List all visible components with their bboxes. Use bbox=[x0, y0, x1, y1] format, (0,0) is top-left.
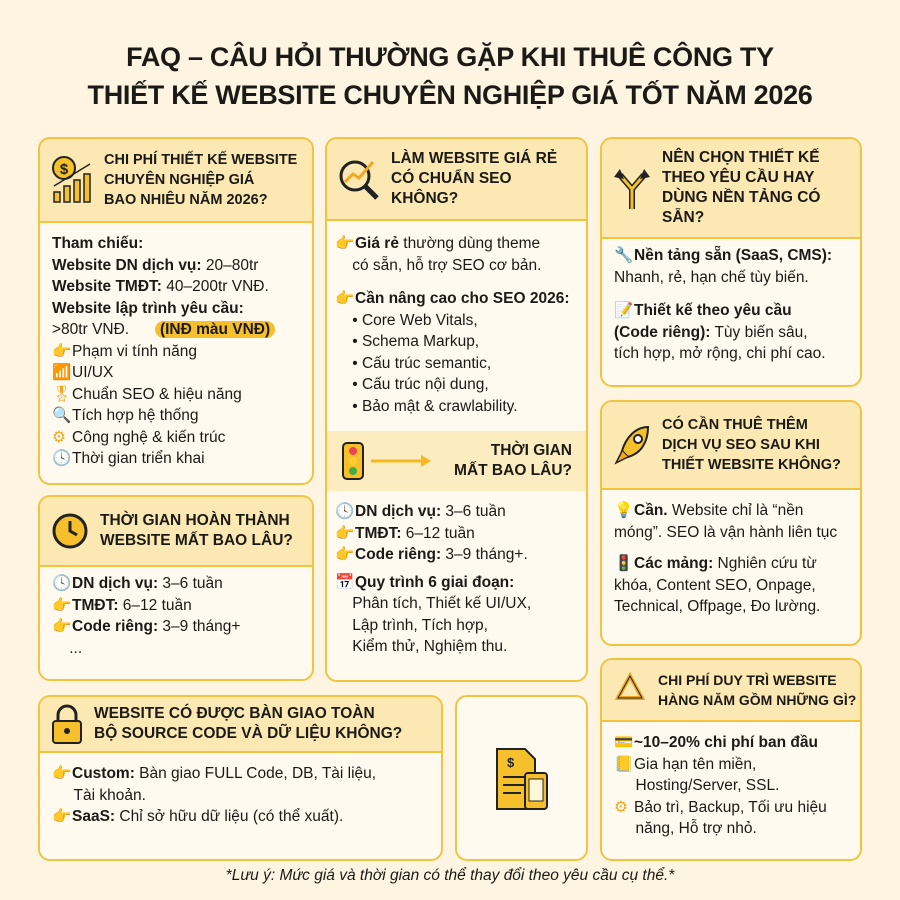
heading: yêu cầu hay nền tảng bbox=[602, 139, 860, 239]
heading: bàn giao bbox=[40, 697, 441, 753]
body: chi phí: Website DN dịch vụ: 20–80tr bbox=[52, 256, 258, 274]
heading: yêu cầu hay nền tảng: NÊN CHỌN THIẾT KẾ bbox=[662, 149, 820, 166]
heading: chi phí: $ bbox=[60, 161, 69, 178]
body: yêu cầu hay nền tảng: Nhanh, rẻ, hạn chế tùy biến. Thiết kế theo yêu cầu bbox=[614, 268, 809, 319]
body: thời gian hoàn thành: DN dịch vụ: 3–6 tuần bbox=[72, 575, 223, 592]
body: thời gian: DN dịch vụ: 3–6 tuần bbox=[355, 503, 506, 520]
body: giá rẻ SEO: 👉 bbox=[335, 235, 354, 252]
body: chi phí: ⚙ bbox=[52, 428, 66, 446]
body: bàn giao: 👉 bbox=[52, 808, 71, 825]
heading: bàn giao: BỘ SOURCE CODE VÀ DỮ LIỆU KHÔNG? bbox=[94, 725, 402, 742]
heading: chi phí bbox=[40, 139, 312, 223]
heading: chi phí: BAO NHIÊU NĂM 2026? bbox=[104, 192, 268, 208]
body: thời gian hoàn thành: 👉 bbox=[52, 596, 71, 614]
footer note: *Lưu ý: Mức giá và thời gian có thể thay đổi theo yêu cầu cụ thể.* bbox=[226, 867, 674, 884]
body: giá rẻ SEO: • Schema Markup, bbox=[352, 333, 479, 350]
panel: yêu cầu hay nền tảng bbox=[600, 137, 862, 387]
body: thời gian: 🕓 bbox=[335, 503, 354, 520]
body: bàn giao bbox=[52, 765, 376, 825]
body: giá rẻ SEO: Giá rẻ thường dùng theme bbox=[355, 235, 540, 252]
body: yêu cầu hay nền tảng bbox=[614, 246, 832, 362]
body: thuê SEO: Technical, Offpage, Đo lường. bbox=[614, 598, 820, 615]
body: chi phí duy trì: ⚙ bbox=[614, 798, 628, 816]
heading: thời gian hoàn thành: WEBSITE MẤT BAO LÂU? bbox=[100, 532, 293, 549]
heading: yêu cầu hay nền tảng: DÙNG NỀN TẢNG CÓ bbox=[662, 189, 820, 206]
panel: chi phí bbox=[38, 137, 314, 485]
heading: giá rẻ SEO bbox=[327, 139, 586, 221]
body: chi phí: Phạm vi tính năng bbox=[72, 342, 197, 360]
panel: chi phí duy trì bbox=[600, 658, 862, 861]
body: chi phí duy trì bbox=[614, 734, 827, 837]
title: FAQ – CÂU HỎI THƯỜNG GẶP KHI THUÊ CÔNG TY bbox=[126, 42, 774, 72]
body: giá rẻ SEO: 👉 bbox=[335, 290, 354, 307]
body: chi phí: Tham chiếu: bbox=[52, 235, 143, 252]
title bbox=[88, 42, 812, 110]
body: thời gian: 👉 bbox=[335, 546, 354, 563]
body: thời gian: Lập trình, Tích hợp, bbox=[352, 616, 488, 634]
body: chi phí: 📶 bbox=[52, 364, 71, 381]
body: thời gian hoàn thành: ... bbox=[69, 640, 82, 656]
heading: chi phí duy trì: HÀNG NĂM GỒM NHỮNG GÌ? bbox=[658, 692, 856, 708]
body: giá rẻ SEO: • Cấu trúc nội dung, bbox=[352, 376, 489, 393]
body: thuê SEO: 💡 bbox=[614, 502, 633, 519]
body: thời gian hoàn thành: 👉 bbox=[52, 618, 71, 635]
heading: thuê SEO: THIẾT WEBSITE KHÔNG? bbox=[662, 457, 841, 473]
panel: thuê SEO bbox=[600, 400, 862, 646]
body: thời gian hoàn thành bbox=[52, 574, 240, 656]
body: chi phí: 🔍 bbox=[52, 407, 71, 424]
body: giá rẻ SEO: có sẵn, hỗ trợ SEO cơ bản. Cần nâng cao cho SEO 2026: bbox=[352, 256, 569, 307]
body: chi phí: Website lập trình yêu cầu: bbox=[52, 300, 244, 316]
body: giá rẻ SEO: • Cấu trúc semantic, bbox=[352, 354, 491, 372]
body: thời gian hoàn thành: TMĐT: 6–12 tuần bbox=[72, 596, 192, 614]
heading: bàn giao: WEBSITE CÓ ĐƯỢC BÀN GIAO TOÀN bbox=[94, 705, 375, 722]
heading: thời gian hoàn thành bbox=[40, 497, 312, 567]
body: thời gian: 📅 bbox=[335, 574, 354, 590]
body: thời gian hoàn thành: 🕓 bbox=[52, 575, 71, 592]
heading: thời gian hoàn thành: THỜI GIAN HOÀN THÀNH bbox=[100, 512, 290, 529]
panel: icon document bbox=[455, 695, 588, 861]
body: yêu cầu hay nền tảng: 🔧 bbox=[614, 247, 633, 264]
body: thời gian bbox=[335, 502, 531, 655]
icon: invoice and phone: $ bbox=[507, 755, 515, 770]
heading: thuê SEO: DỊCH VỤ SEO SAU KHI bbox=[662, 437, 820, 453]
body: chi phí bbox=[52, 235, 275, 467]
body: chi phí: 🕓 bbox=[52, 450, 71, 467]
heading: thuê SEO: CÓ CẦN THUÊ THÊM bbox=[662, 417, 808, 433]
body: bàn giao: SaaS: Chỉ sở hữu dữ liệu (có thể xuất). bbox=[72, 808, 343, 825]
heading: chi phí: CHUYÊN NGHIỆP GIÁ bbox=[104, 172, 254, 188]
body: yêu cầu hay nền tảng: Nền tảng sẵn (SaaS, CMS): bbox=[634, 247, 832, 264]
body: chi phí: Website TMĐT: 40–200tr VNĐ. bbox=[52, 278, 269, 295]
body: chi phí: Thời gian triển khai bbox=[72, 450, 205, 467]
sub-heading: thời gian: MẤT BAO LÂU? bbox=[454, 462, 572, 479]
body: chi phí duy trì: ~10–20% chi phí ban đầu bbox=[634, 734, 818, 751]
panel: thời gian hoàn thành bbox=[38, 495, 314, 681]
body: bàn giao: 👉 bbox=[52, 765, 71, 782]
body: thời gian: Kiểm thử, Nghiệm thu. bbox=[352, 638, 507, 655]
body: chi phí: 🎖 bbox=[52, 386, 72, 402]
body: chi phí: Công nghệ & kiến trúc bbox=[72, 428, 225, 446]
body: thời gian: Phân tích, Thiết kế UI/UX, bbox=[352, 595, 531, 612]
body: chi phí duy trì: 💳 bbox=[614, 734, 633, 751]
heading: giá rẻ SEO: KHÔNG? bbox=[391, 190, 458, 207]
body: thời gian: 👉 bbox=[335, 524, 354, 542]
body: thời gian hoàn thành: Code riêng: 3–9 tháng+ bbox=[72, 618, 240, 635]
body: thuê SEO: Cần. Website chỉ là “nền bbox=[634, 502, 803, 519]
panel: giá rẻ SEO bbox=[325, 137, 588, 682]
body: yêu cầu hay nền tảng: (Code riêng): Tùy biến sâu, bbox=[614, 324, 808, 340]
body: bàn giao: Custom: Bàn giao FULL Code, DB, Tài liệu, bbox=[72, 765, 376, 782]
body: giá rẻ SEO bbox=[335, 235, 569, 414]
body: chi phí: Tích hợp hệ thống bbox=[72, 407, 198, 424]
icon: invoice and phone bbox=[496, 748, 548, 810]
body: giá rẻ SEO: • Bảo mật & crawlability. bbox=[352, 398, 518, 414]
body: chi phí: Chuẩn SEO & hiệu năng bbox=[72, 386, 242, 402]
body: bàn giao: Tài khoản. bbox=[74, 786, 146, 804]
body: chi phí duy trì: năng, Hỗ trợ nhỏ. bbox=[636, 820, 757, 837]
heading: chi phí duy trì bbox=[602, 660, 860, 722]
body: yêu cầu hay nền tảng: 📝 bbox=[614, 302, 633, 319]
body: thời gian: TMĐT: 6–12 tuần bbox=[355, 524, 475, 542]
panel: bàn giao source code bbox=[38, 695, 443, 861]
body: chi phí duy trì: Gia hạn tên miền, bbox=[634, 756, 756, 772]
title: THIẾT KẾ WEBSITE CHUYÊN NGHIỆP GIÁ TỐT NĂM 2026 bbox=[88, 80, 812, 110]
sub-heading: thời gian: THỜI GIAN bbox=[491, 442, 572, 459]
body: chi phí duy trì: 📒 bbox=[614, 756, 633, 772]
heading: giá rẻ SEO: LÀM WEBSITE GIÁ RẺ bbox=[391, 150, 557, 167]
body: thuê SEO: 🚦 bbox=[614, 555, 633, 572]
body: thuê SEO: móng”. SEO là vận hành liên tục Các mảng: Nghiên cứu từ bbox=[614, 524, 837, 572]
heading: chi phí duy trì: CHI PHÍ DUY TRÌ WEBSITE bbox=[658, 672, 837, 688]
sub-heading: thời gian bbox=[327, 431, 586, 491]
body: chi phí: 👉 bbox=[52, 342, 71, 360]
body: chi phí duy trì: Hosting/Server, SSL. bbox=[636, 777, 779, 794]
body: thời gian: Code riêng: 3–9 tháng+. Quy trình 6 giai đoạn: bbox=[355, 546, 528, 590]
body: chi phí: UI/UX bbox=[72, 364, 113, 381]
heading: chi phí: CHI PHÍ THIẾT KẾ WEBSITE bbox=[104, 152, 297, 168]
body: yêu cầu hay nền tảng: tích hợp, mở rộng, chi phí cao. bbox=[614, 345, 826, 362]
heading: yêu cầu hay nền tảng: THEO YÊU CẦU HAY bbox=[662, 169, 814, 186]
body: thuê SEO: khóa, Content SEO, Onpage, bbox=[614, 576, 816, 594]
body: chi phí: >80tr VNĐ. (INĐ màu VNĐ) bbox=[52, 321, 270, 338]
body: giá rẻ SEO: • Core Web Vitals, bbox=[352, 312, 478, 328]
body: thuê SEO bbox=[614, 501, 837, 615]
body: chi phí duy trì: Bảo trì, Backup, Tối ưu hiệu bbox=[634, 798, 827, 816]
heading: yêu cầu hay nền tảng: SẴN? bbox=[662, 209, 704, 226]
heading: thuê SEO bbox=[602, 402, 860, 490]
heading: giá rẻ SEO: CÓ CHUẨN SEO bbox=[391, 170, 512, 187]
